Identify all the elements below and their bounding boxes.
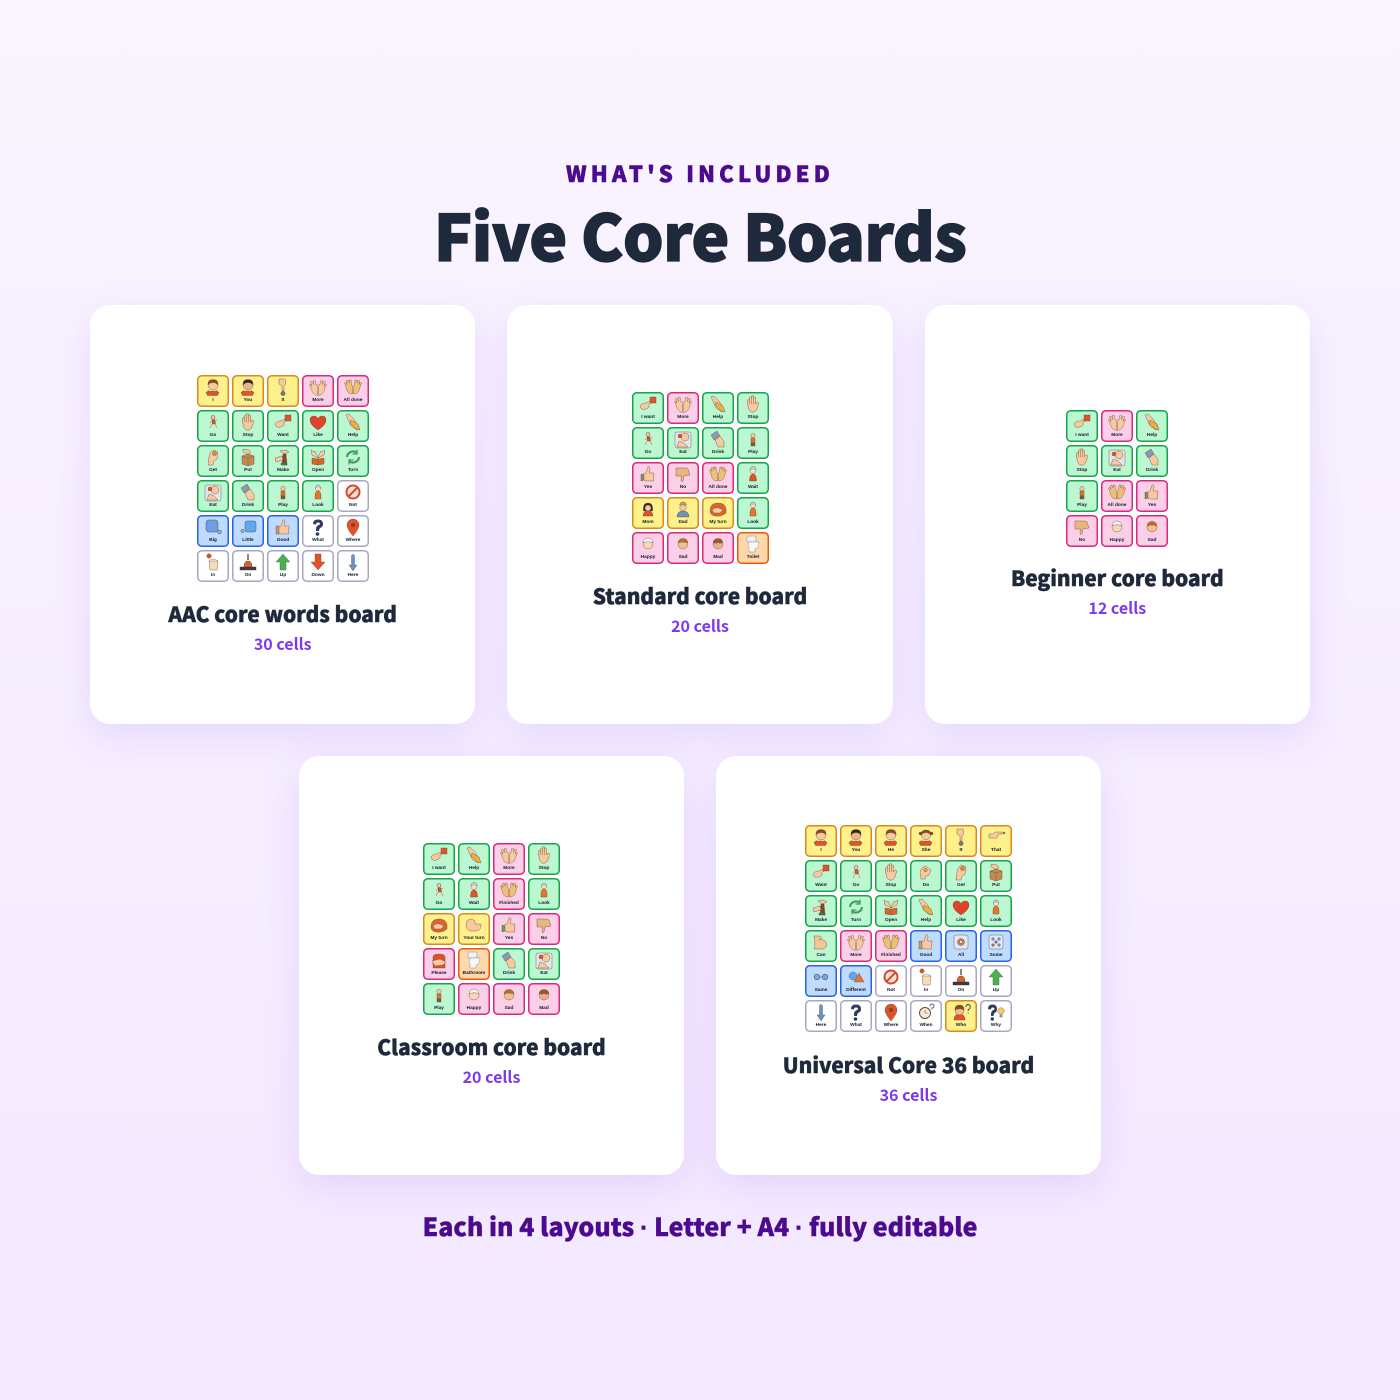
board: 20 cells: All done: [709, 484, 728, 490]
board: 20 cells: More: [677, 414, 689, 420]
footer note: Each in 4 layouts · Letter + A4 · fully editable: [422, 1208, 978, 1244]
board: 30 cells: Go: [210, 432, 216, 438]
title: Five Core Boards: [434, 188, 966, 280]
board: 36 cells: In: [924, 987, 928, 993]
board name: Classroom core board: [377, 1031, 606, 1061]
panel: Classroom core board: [299, 756, 684, 1175]
panel: Beginner core board: [925, 305, 1310, 724]
board: 36 cells: Why: [991, 1022, 1001, 1028]
board: 30 cells: [197, 375, 369, 582]
board: 30 cells: Down: [311, 572, 325, 578]
board: 20 cells: I want: [641, 414, 655, 420]
board: 20 cells: Mom: [642, 519, 654, 525]
board: 12 cells: [1066, 410, 1168, 547]
board: 36 cells: Go: [853, 882, 859, 888]
board: 20 cells: Mad: [713, 554, 723, 560]
board: 36 cells: She: [922, 847, 931, 853]
board: 30 cells: Eat: [209, 502, 217, 508]
board: 30 cells: Up: [280, 572, 286, 578]
board: 30 cells: Drink: [242, 502, 254, 508]
board: 36 cells: You: [852, 847, 860, 853]
board name: AAC core words board: [168, 598, 397, 628]
board: 20 cells: Help: [469, 865, 479, 871]
board: 20 cells: Yes: [505, 935, 513, 941]
board: 36 cells: It: [960, 847, 963, 853]
board: 36 cells: On: [958, 987, 964, 993]
board: 12 cells: Yes: [1148, 502, 1156, 508]
board: 12 cells: Eat: [1113, 467, 1121, 473]
board: 20 cells: I want: [432, 865, 446, 871]
board: 20 cells: Eat: [679, 449, 687, 455]
board: 20 cells: Your turn: [463, 935, 485, 941]
board: 36 cells: What: [850, 1022, 862, 1028]
board: 30 cells: Make: [277, 467, 289, 473]
board: 30 cells: In: [211, 572, 215, 578]
board: 20 cells: Drink: [503, 970, 515, 976]
board: 30 cells: Open: [312, 467, 324, 473]
board: 20 cells: Wait: [748, 484, 758, 490]
board: 20 cells: My turn: [709, 519, 727, 525]
board: 36 cells: When: [919, 1022, 933, 1028]
eyebrow heading: WHAT'S INCLUDED: [566, 157, 834, 189]
board: 36 cells: Finished: [881, 952, 901, 958]
board: 20 cells: My turn: [430, 935, 448, 941]
board: 30 cells: Want: [277, 432, 289, 438]
board: 30 cells: You: [244, 397, 252, 403]
board: 20 cells: Wait: [469, 900, 479, 906]
board: 36 cells: [805, 825, 1012, 1032]
board: 30 cells: Big: [209, 537, 217, 543]
board: 30 cells: Where: [346, 537, 361, 543]
cell count: 30 cells: [254, 631, 312, 655]
board: 20 cells: Happy: [641, 554, 656, 560]
panel: AAC core words board: [90, 305, 475, 724]
board: 36 cells: Up: [993, 987, 999, 993]
board: 36 cells: Where: [884, 1022, 899, 1028]
board: 20 cells: Bathroom: [463, 970, 485, 976]
board: 30 cells: Play: [278, 502, 288, 508]
board: 20 cells: Happy: [467, 1005, 482, 1011]
board: 20 cells: Help: [713, 414, 723, 420]
cell count: 36 cells: [880, 1082, 937, 1106]
board: 30 cells: Like: [313, 432, 323, 438]
board: 30 cells: Turn: [348, 467, 358, 473]
board: 20 cells: [423, 843, 560, 1015]
cell count: 20 cells: [671, 613, 729, 637]
board: 36 cells: Good: [920, 952, 932, 958]
board: 20 cells: Yes: [644, 484, 652, 490]
board: 12 cells: Play: [1077, 502, 1087, 508]
board name: Beginner core board: [1011, 562, 1224, 592]
board: 30 cells: On: [245, 572, 251, 578]
board: 36 cells: Look: [990, 917, 1002, 923]
board: 36 cells: All: [958, 952, 964, 958]
board: 12 cells: Help: [1147, 432, 1157, 438]
board: 20 cells: Sad: [679, 554, 687, 560]
board: 20 cells: More: [503, 865, 515, 871]
board: 12 cells: Happy: [1110, 537, 1125, 543]
board: 20 cells: Stop: [748, 414, 758, 420]
board: 20 cells: Eat: [540, 970, 548, 976]
board: 20 cells: Finished: [499, 900, 519, 906]
board: 30 cells: I: [212, 397, 214, 403]
board: 20 cells: Go: [436, 900, 442, 906]
board: 36 cells: Turn: [851, 917, 861, 923]
board: 30 cells: Little: [242, 537, 254, 543]
board: 36 cells: Some: [989, 952, 1003, 958]
board: 20 cells: Dad: [678, 519, 688, 525]
board: 20 cells: Drink: [712, 449, 724, 455]
board: 36 cells: Help: [921, 917, 931, 923]
board: 36 cells: Can: [816, 952, 826, 958]
board: 30 cells: Not: [349, 502, 357, 508]
board: 36 cells: Get: [957, 882, 965, 888]
board name: Standard core board: [593, 580, 807, 610]
board: 30 cells: Look: [312, 502, 324, 508]
board: 12 cells: I want: [1075, 432, 1089, 438]
board: 20 cells: Sad: [505, 1005, 513, 1011]
board: 12 cells: Stop: [1077, 467, 1087, 473]
board: 36 cells: Open: [885, 917, 897, 923]
board: 12 cells: Sad: [1148, 537, 1156, 543]
board: 12 cells: More: [1111, 432, 1123, 438]
board: 36 cells: More: [850, 952, 862, 958]
board name: Universal Core 36 board: [783, 1049, 1034, 1079]
board: 20 cells: Stop: [539, 865, 549, 871]
board: 30 cells: All done: [344, 397, 363, 403]
board: 20 cells: Toilet: [747, 554, 760, 560]
board: 30 cells: Put: [244, 467, 252, 473]
board: 36 cells: Like: [956, 917, 966, 923]
board: 30 cells: More: [312, 397, 324, 403]
cell count: 12 cells: [1088, 595, 1146, 619]
board: 30 cells: What: [312, 537, 324, 543]
board: 20 cells: Play: [748, 449, 758, 455]
panel: Universal Core 36 board: [716, 756, 1101, 1175]
board: 20 cells: Play: [434, 1005, 444, 1011]
board: 30 cells: Help: [348, 432, 358, 438]
board: 36 cells: Who: [956, 1022, 966, 1028]
board: 36 cells: Make: [815, 917, 827, 923]
board: 36 cells: That: [991, 847, 1001, 853]
board: 20 cells: Look: [538, 900, 550, 906]
board: 30 cells: Get: [209, 467, 217, 473]
panel: Standard core board: [507, 305, 893, 724]
board: 12 cells: Drink: [1146, 467, 1158, 473]
board: 20 cells: Go: [645, 449, 651, 455]
board: 36 cells: Same: [815, 987, 828, 993]
board: 30 cells: Good: [277, 537, 289, 543]
board: 36 cells: Not: [887, 987, 895, 993]
board: 36 cells: Different: [846, 987, 866, 993]
board: 30 cells: Stop: [243, 432, 253, 438]
board: 36 cells: Put: [992, 882, 1000, 888]
board: 36 cells: I: [820, 847, 822, 853]
board: 36 cells: Want: [815, 882, 827, 888]
board: 12 cells: All done: [1108, 502, 1127, 508]
board: 36 cells: Stop: [886, 882, 896, 888]
board: 20 cells: No: [541, 935, 547, 941]
board: 20 cells: Look: [747, 519, 759, 525]
board: 36 cells: Here: [816, 1022, 827, 1028]
board: 20 cells: Mad: [539, 1005, 549, 1011]
board: 20 cells: No: [680, 484, 686, 490]
board: 30 cells: It: [282, 397, 285, 403]
board: 36 cells: He: [888, 847, 894, 853]
board: 36 cells: Do: [923, 882, 929, 888]
board: 12 cells: No: [1079, 537, 1085, 543]
cell count: 20 cells: [463, 1064, 520, 1088]
board: 20 cells: Please: [431, 970, 447, 976]
board: 30 cells: Here: [348, 572, 359, 578]
board: 20 cells: [632, 392, 769, 564]
